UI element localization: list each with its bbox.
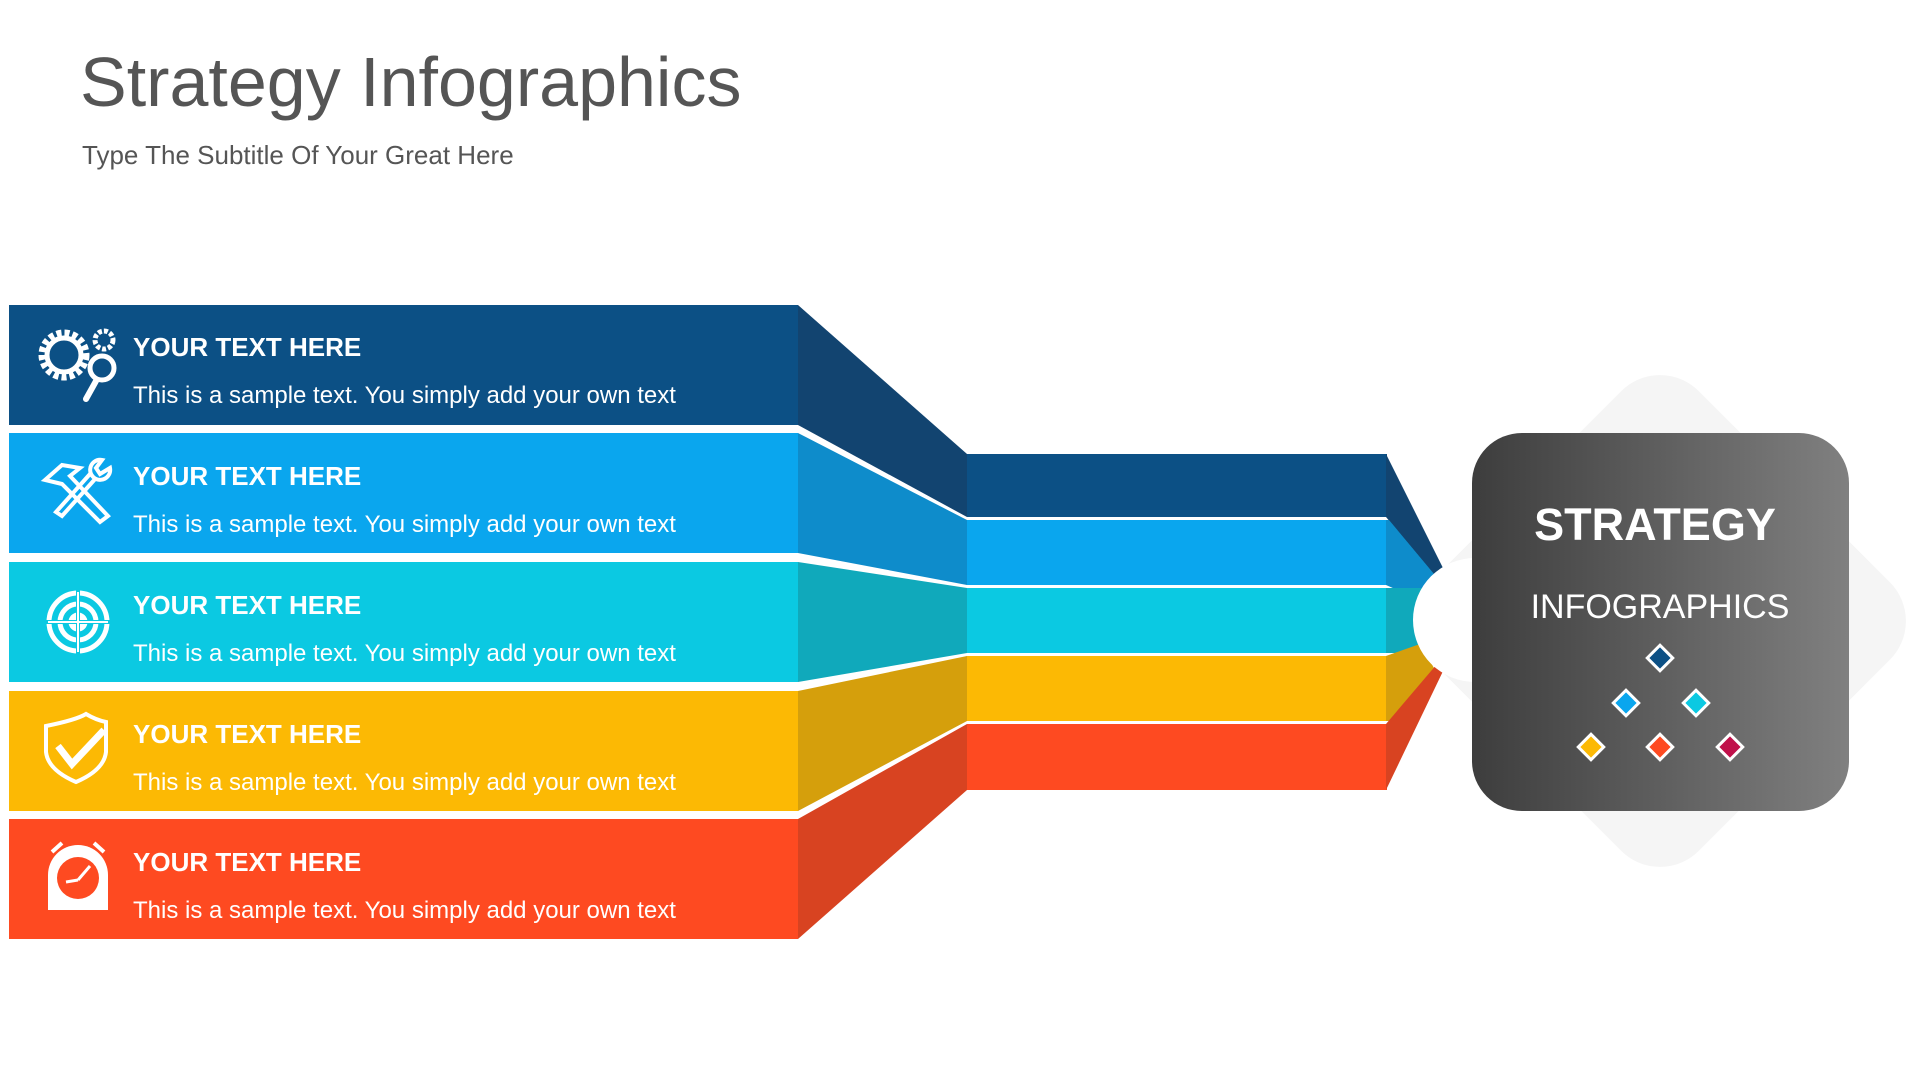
icon: tools: [45, 460, 110, 522]
text: YOUR TEXT HERE: [133, 847, 361, 877]
text: This is a sample text. You simply add your own text: [133, 769, 676, 796]
bars: [9, 305, 798, 939]
text: YOUR TEXT HERE: [133, 590, 361, 620]
text: This is a sample text. You simply add your own text: [133, 382, 676, 409]
middle bands with arrow tip: [967, 454, 1445, 790]
icon: target: [44, 588, 112, 656]
card: [1472, 433, 1849, 811]
text: This is a sample text. You simply add your own text: [133, 511, 676, 538]
text: YOUR TEXT HERE: [133, 461, 361, 491]
background diamond: [1391, 352, 1920, 890]
text: This is a sample text. You simply add your own text: [133, 640, 676, 667]
title: Strategy Infographics: [80, 43, 741, 121]
bar texts: YOUR TEXT HERE: [133, 332, 361, 362]
card: INFOGRAPHICS: [1531, 588, 1789, 626]
icon: clock: [48, 843, 108, 910]
text: YOUR TEXT HERE: [133, 719, 361, 749]
text: This is a sample text. You simply add your own text: [133, 897, 676, 924]
connectors: [798, 305, 967, 939]
card: STRATEGY: [1534, 499, 1776, 550]
subtitle: Type The Subtitle Of Your Great Here: [82, 140, 514, 170]
icon: gears: [42, 331, 114, 399]
icon: shield: [46, 714, 106, 782]
